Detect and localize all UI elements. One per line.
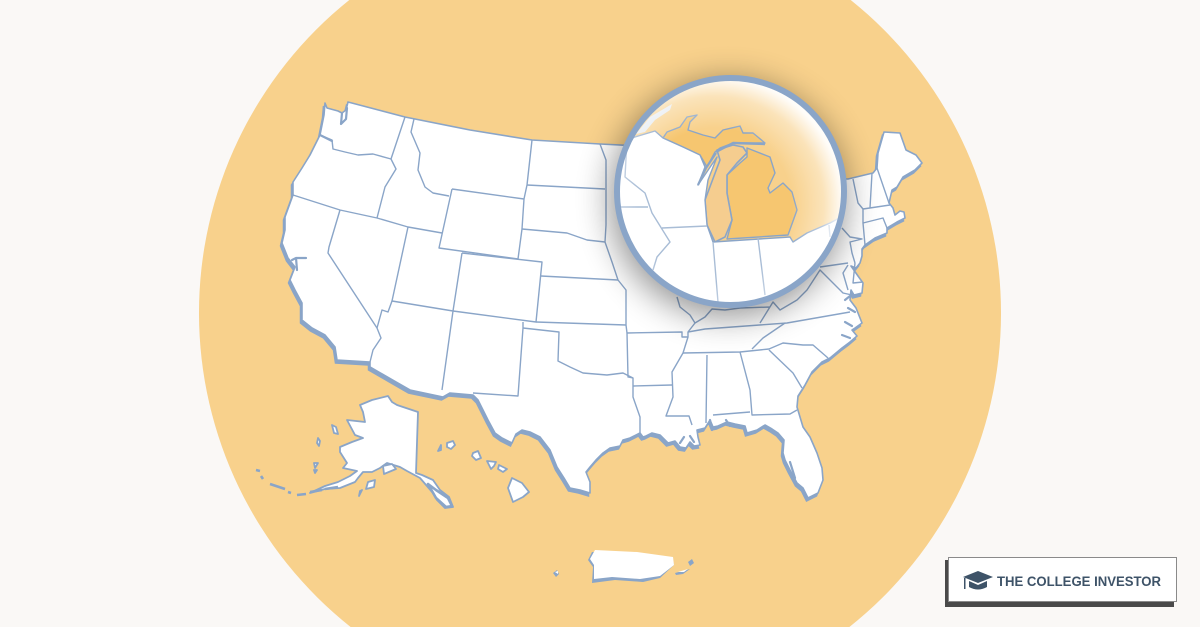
- map outline: [282, 102, 922, 498]
- Puerto Rico landmass: [555, 550, 688, 579]
- background circle: [199, 0, 1001, 627]
- state borders in lens: [620, 140, 830, 302]
- map: Alaska: [256, 396, 453, 508]
- Puerto Rico shadow: [553, 552, 694, 583]
- Lake Michigan: [705, 145, 747, 242]
- logo badge: [945, 558, 1176, 607]
- map: Hawaii: [438, 441, 529, 502]
- badge box: [948, 558, 1176, 602]
- icon: graduation cap: [963, 571, 993, 590]
- coastal inlets: [292, 108, 855, 478]
- lens highlight: [618, 78, 844, 304]
- Superior highlight: [636, 104, 672, 134]
- map: contiguous United States: [280, 102, 922, 501]
- Green Bay: [698, 153, 716, 185]
- map: Puerto Rico: [553, 550, 694, 583]
- Aleutian chain: [256, 470, 338, 495]
- map coast shadow: [280, 105, 920, 501]
- Michigan: [663, 115, 797, 239]
- lens base: [618, 78, 844, 304]
- logo text: THE COLLEGE INVESTOR: [997, 574, 1161, 589]
- Alaska mainland: [310, 396, 453, 508]
- Alaska islands: [314, 425, 396, 496]
- badge shadow: [945, 560, 1174, 607]
- lens shadow: [610, 81, 846, 317]
- southeast archipelago: [428, 484, 452, 507]
- lens contents: [620, 81, 841, 302]
- state borders: [293, 117, 890, 433]
- Wisconsin and surrounding states: [620, 130, 838, 302]
- lens ring: [617, 78, 844, 305]
- magnifier lens: [600, 78, 850, 320]
- Upper peninsula channel: [716, 143, 765, 152]
